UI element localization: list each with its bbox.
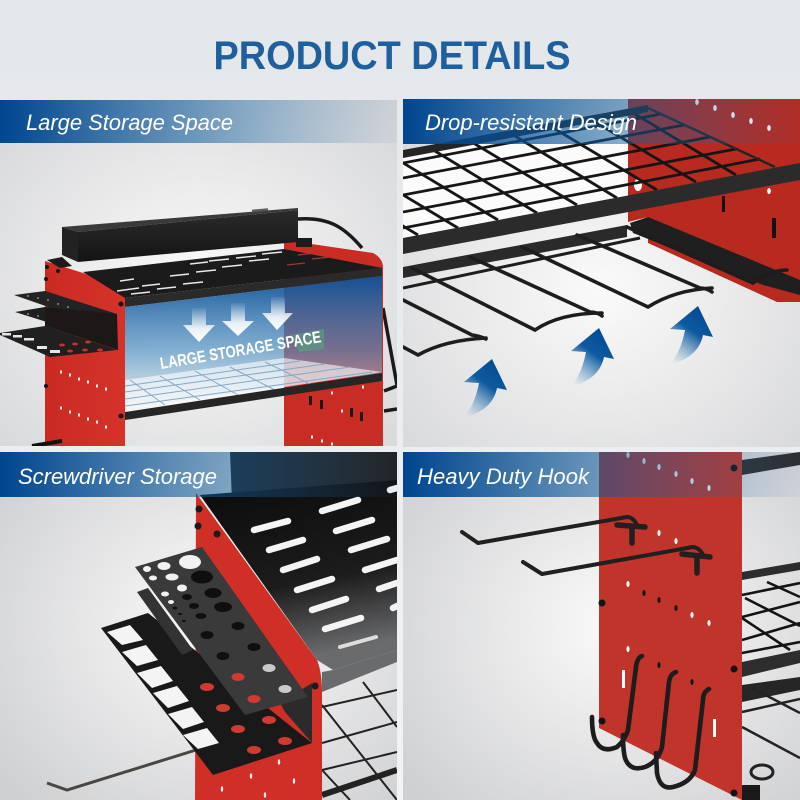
panel: drop-resistant design (403, 99, 800, 447)
lower wire shelf (125, 358, 382, 412)
power strip (47, 208, 312, 268)
hanging rack bar (403, 225, 640, 288)
middle small-hole plate (137, 588, 193, 655)
3d label: LARGE STORAGE SPACE (159, 328, 322, 373)
wire shelf below (322, 682, 397, 800)
panel: large storage space (0, 100, 397, 446)
straight hooks (462, 517, 710, 574)
tool rack tray (630, 217, 800, 295)
lower square-hole tray (101, 613, 312, 775)
shelf section right of panel (742, 452, 800, 800)
header: heavy duty hook: Heavy Duty Hook (417, 464, 590, 489)
right red side panel (284, 240, 383, 446)
down arrows (183, 297, 293, 342)
dark box top (230, 452, 397, 492)
black shelf (200, 480, 397, 692)
storage space highlight box (125, 276, 382, 408)
green label highlight (290, 329, 324, 352)
red panel (598, 452, 742, 800)
red side panel (194, 493, 322, 800)
lower shelf front bar (125, 373, 382, 420)
panel: screwdriver storage (0, 452, 397, 800)
header: heavy duty hook (403, 452, 800, 497)
header: screwdriver storage: Screwdriver Storage (18, 464, 217, 489)
up arrows (463, 306, 713, 418)
upper shelf (83, 249, 382, 307)
header: drop-resistant design (403, 99, 800, 144)
header: large storage space (0, 100, 397, 143)
tool holder (0, 291, 118, 357)
left red side panel (32, 261, 125, 446)
power cable (298, 219, 397, 411)
panel: heavy duty hook (403, 452, 800, 800)
header: screwdriver storage (0, 452, 397, 497)
wire shelf (403, 105, 776, 238)
j hooks (592, 656, 709, 787)
red side panel (628, 99, 800, 302)
shelf front bar (403, 163, 800, 254)
upper round-hole plate (135, 547, 308, 715)
long hook (46, 749, 196, 792)
wire fingers (403, 227, 787, 355)
header: large storage space: Large Storage Space (26, 110, 233, 135)
header: drop-resistant design: Drop-resistant Design (425, 110, 637, 135)
title: PRODUCT DETAILS (214, 34, 570, 78)
